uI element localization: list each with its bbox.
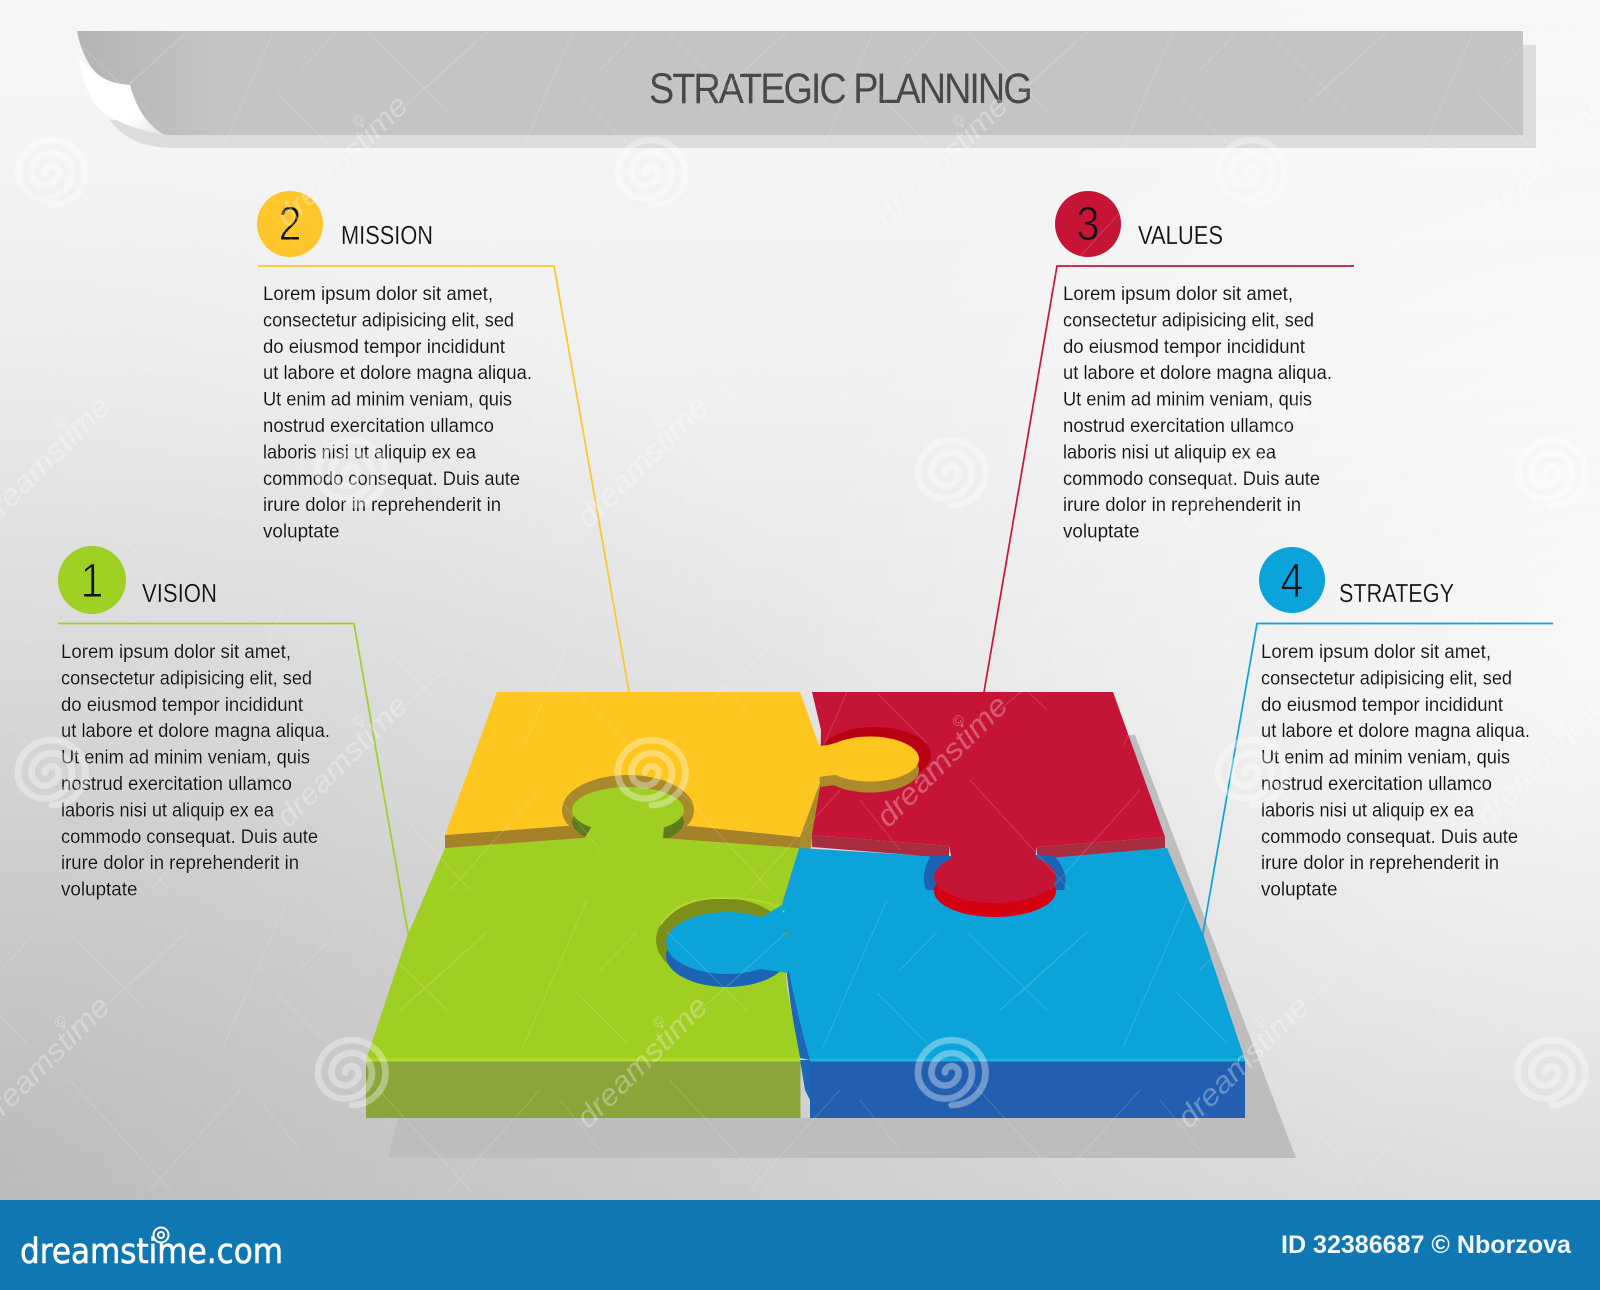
text block strategy: irure dolor in reprehenderit in [1261,852,1499,874]
watermark overlay: © [51,412,70,432]
socket and knob: yellow into red [816,727,931,792]
badge 3: 3 [1076,198,1100,251]
text block mission: irure dolor in reprehenderit in [263,494,501,516]
watermark overlay: © [649,1012,668,1032]
badge 4 [1259,547,1325,613]
badge 4: 4 [1280,555,1304,608]
step 2: mission [257,191,532,543]
text block mission: ut labore et dolore magna aliqua. [263,362,532,384]
watermark overlay: © [949,711,968,731]
badge 2 [257,191,323,257]
text block vision: Lorem ipsum dolor sit amet, [61,641,291,663]
watermark overlay: © [1549,711,1568,731]
text block values: nostrud exercitation ullamco [1063,415,1294,437]
badge 2: 2 [278,198,302,251]
watermark overlay: © [1549,111,1568,131]
piece: yellow body [445,692,822,849]
text block values: Ut enim ad minim veniam, quis [1063,389,1312,411]
watermark overlay: © [349,711,368,731]
text block vision: laboris nisi ut aliquip ex ea [61,799,274,821]
text block strategy: Ut enim ad minim veniam, quis [1261,747,1510,769]
text block vision [61,641,330,901]
watermark overlay: dreamstime [1470,689,1600,834]
watermark overlay: dreamstime [870,89,1015,234]
text block mission: commodo consequat. Duis aute [263,468,520,490]
text block mission: do eiusmod tempor incididunt [263,336,506,358]
text block vision: do eiusmod tempor incididunt [61,694,304,716]
text block strategy: Lorem ipsum dolor sit amet, [1261,641,1491,663]
watermark overlay: © [51,1012,70,1032]
text block vision: commodo consequat. Duis aute [61,826,318,848]
text block strategy: nostrud exercitation ullamco [1261,773,1492,795]
text block strategy: ut labore et dolore magna aliqua. [1261,720,1530,742]
text block mission [263,283,532,543]
text block vision: nostrud exercitation ullamco [61,773,292,795]
gold wall between yellow and red [782,780,821,912]
text block values: do eiusmod tempor incididunt [1063,336,1306,358]
watermark overlay: dreamstime [1171,390,1316,535]
text block vision: ut labore et dolore magna aliqua. [61,720,330,742]
text block mission: Ut enim ad minim veniam, quis [263,389,512,411]
text block mission: Lorem ipsum dolor sit amet, [263,283,493,305]
piece: red body [812,692,1165,859]
text block values [1063,283,1332,543]
leader line: mission [258,266,629,692]
text block values: ut labore et dolore magna aliqua. [1063,362,1332,384]
watermark overlay: © [1250,1012,1269,1032]
page curl [79,58,165,135]
blue wall edge [800,1060,810,1100]
watermark overlay: dreamstime [1470,89,1600,234]
step 1: vision [58,546,330,901]
text block values: commodo consequat. Duis aute [1063,468,1320,490]
watermark overlay: dreamstime [570,990,715,1135]
leader line: strategy [1202,624,1553,939]
socket and knob: blue into green [656,898,790,987]
heading strategy: STRATEGY [1339,578,1454,608]
jigsaw puzzle [366,692,1245,1118]
watermark overlay: © [349,111,368,131]
banner back shadow [110,45,1536,148]
text block values: irure dolor in reprehenderit in [1063,494,1301,516]
text block values: voluptate [1063,521,1140,543]
heading vision: VISION [142,578,217,608]
text block vision: Ut enim ad minim veniam, quis [61,747,310,769]
text block vision: voluptate [61,879,138,901]
text block strategy: voluptate [1261,879,1338,901]
watermark overlay: dreamstime [570,390,715,535]
text block strategy [1261,641,1530,901]
piece: blue body [782,848,1245,1118]
text block values: laboris nisi ut aliquip ex ea [1063,441,1276,463]
watermark overlay: dreamstime [270,89,415,234]
knob: green into yellow [572,787,684,839]
step 4: strategy [1259,547,1530,901]
footer logo spiral icon [154,1228,168,1242]
banner face [77,31,1523,135]
text block mission: consectetur adipisicing elit, sed [263,309,514,331]
text block values: Lorem ipsum dolor sit amet, [1063,283,1293,305]
piece: green body [366,838,800,1118]
title: STRATEGIC PLANNING [649,64,1033,113]
watermark overlay: dreamstime [270,689,415,834]
banner: strategic planning ribbon [77,31,1536,148]
badge 3 [1055,191,1121,257]
leader line: values [984,266,1354,692]
text block mission: voluptate [263,521,340,543]
text block mission: laboris nisi ut aliquip ex ea [263,441,476,463]
text block strategy: consectetur adipisicing elit, sed [1261,667,1512,689]
text block mission: nostrud exercitation ullamco [263,415,494,437]
yellow socket wall [562,775,694,845]
footer logo text: dreamstime.com [20,1232,283,1272]
watermark overlay: © [649,412,668,432]
heading mission: MISSION [341,220,433,250]
text block vision: consectetur adipisicing elit, sed [61,667,312,689]
socket and knob: red into blue [924,846,1066,917]
footer credit: ID 32386687 © Nborzova [1281,1231,1572,1259]
puzzle shadow [388,735,1296,1158]
watermark overlay: © [1250,412,1269,432]
watermark overlay: dreamstime [1171,990,1316,1135]
watermark overlay: © [949,111,968,131]
watermark overlay: dreamstime [870,689,1015,834]
badge 1 [58,546,126,614]
blue side wall [787,960,810,1060]
text block strategy: commodo consequat. Duis aute [1261,826,1518,848]
step 3: values [1055,191,1332,543]
text block strategy: laboris nisi ut aliquip ex ea [1261,799,1474,821]
heading values: VALUES [1138,220,1223,250]
footer bar [0,1200,1600,1290]
green knob wall [572,799,684,845]
leader line: vision [58,624,409,939]
badge 1: 1 [80,555,104,608]
text block strategy: do eiusmod tempor incididunt [1261,694,1504,716]
text block values: consectetur adipisicing elit, sed [1063,309,1314,331]
text block vision: irure dolor in reprehenderit in [61,852,299,874]
